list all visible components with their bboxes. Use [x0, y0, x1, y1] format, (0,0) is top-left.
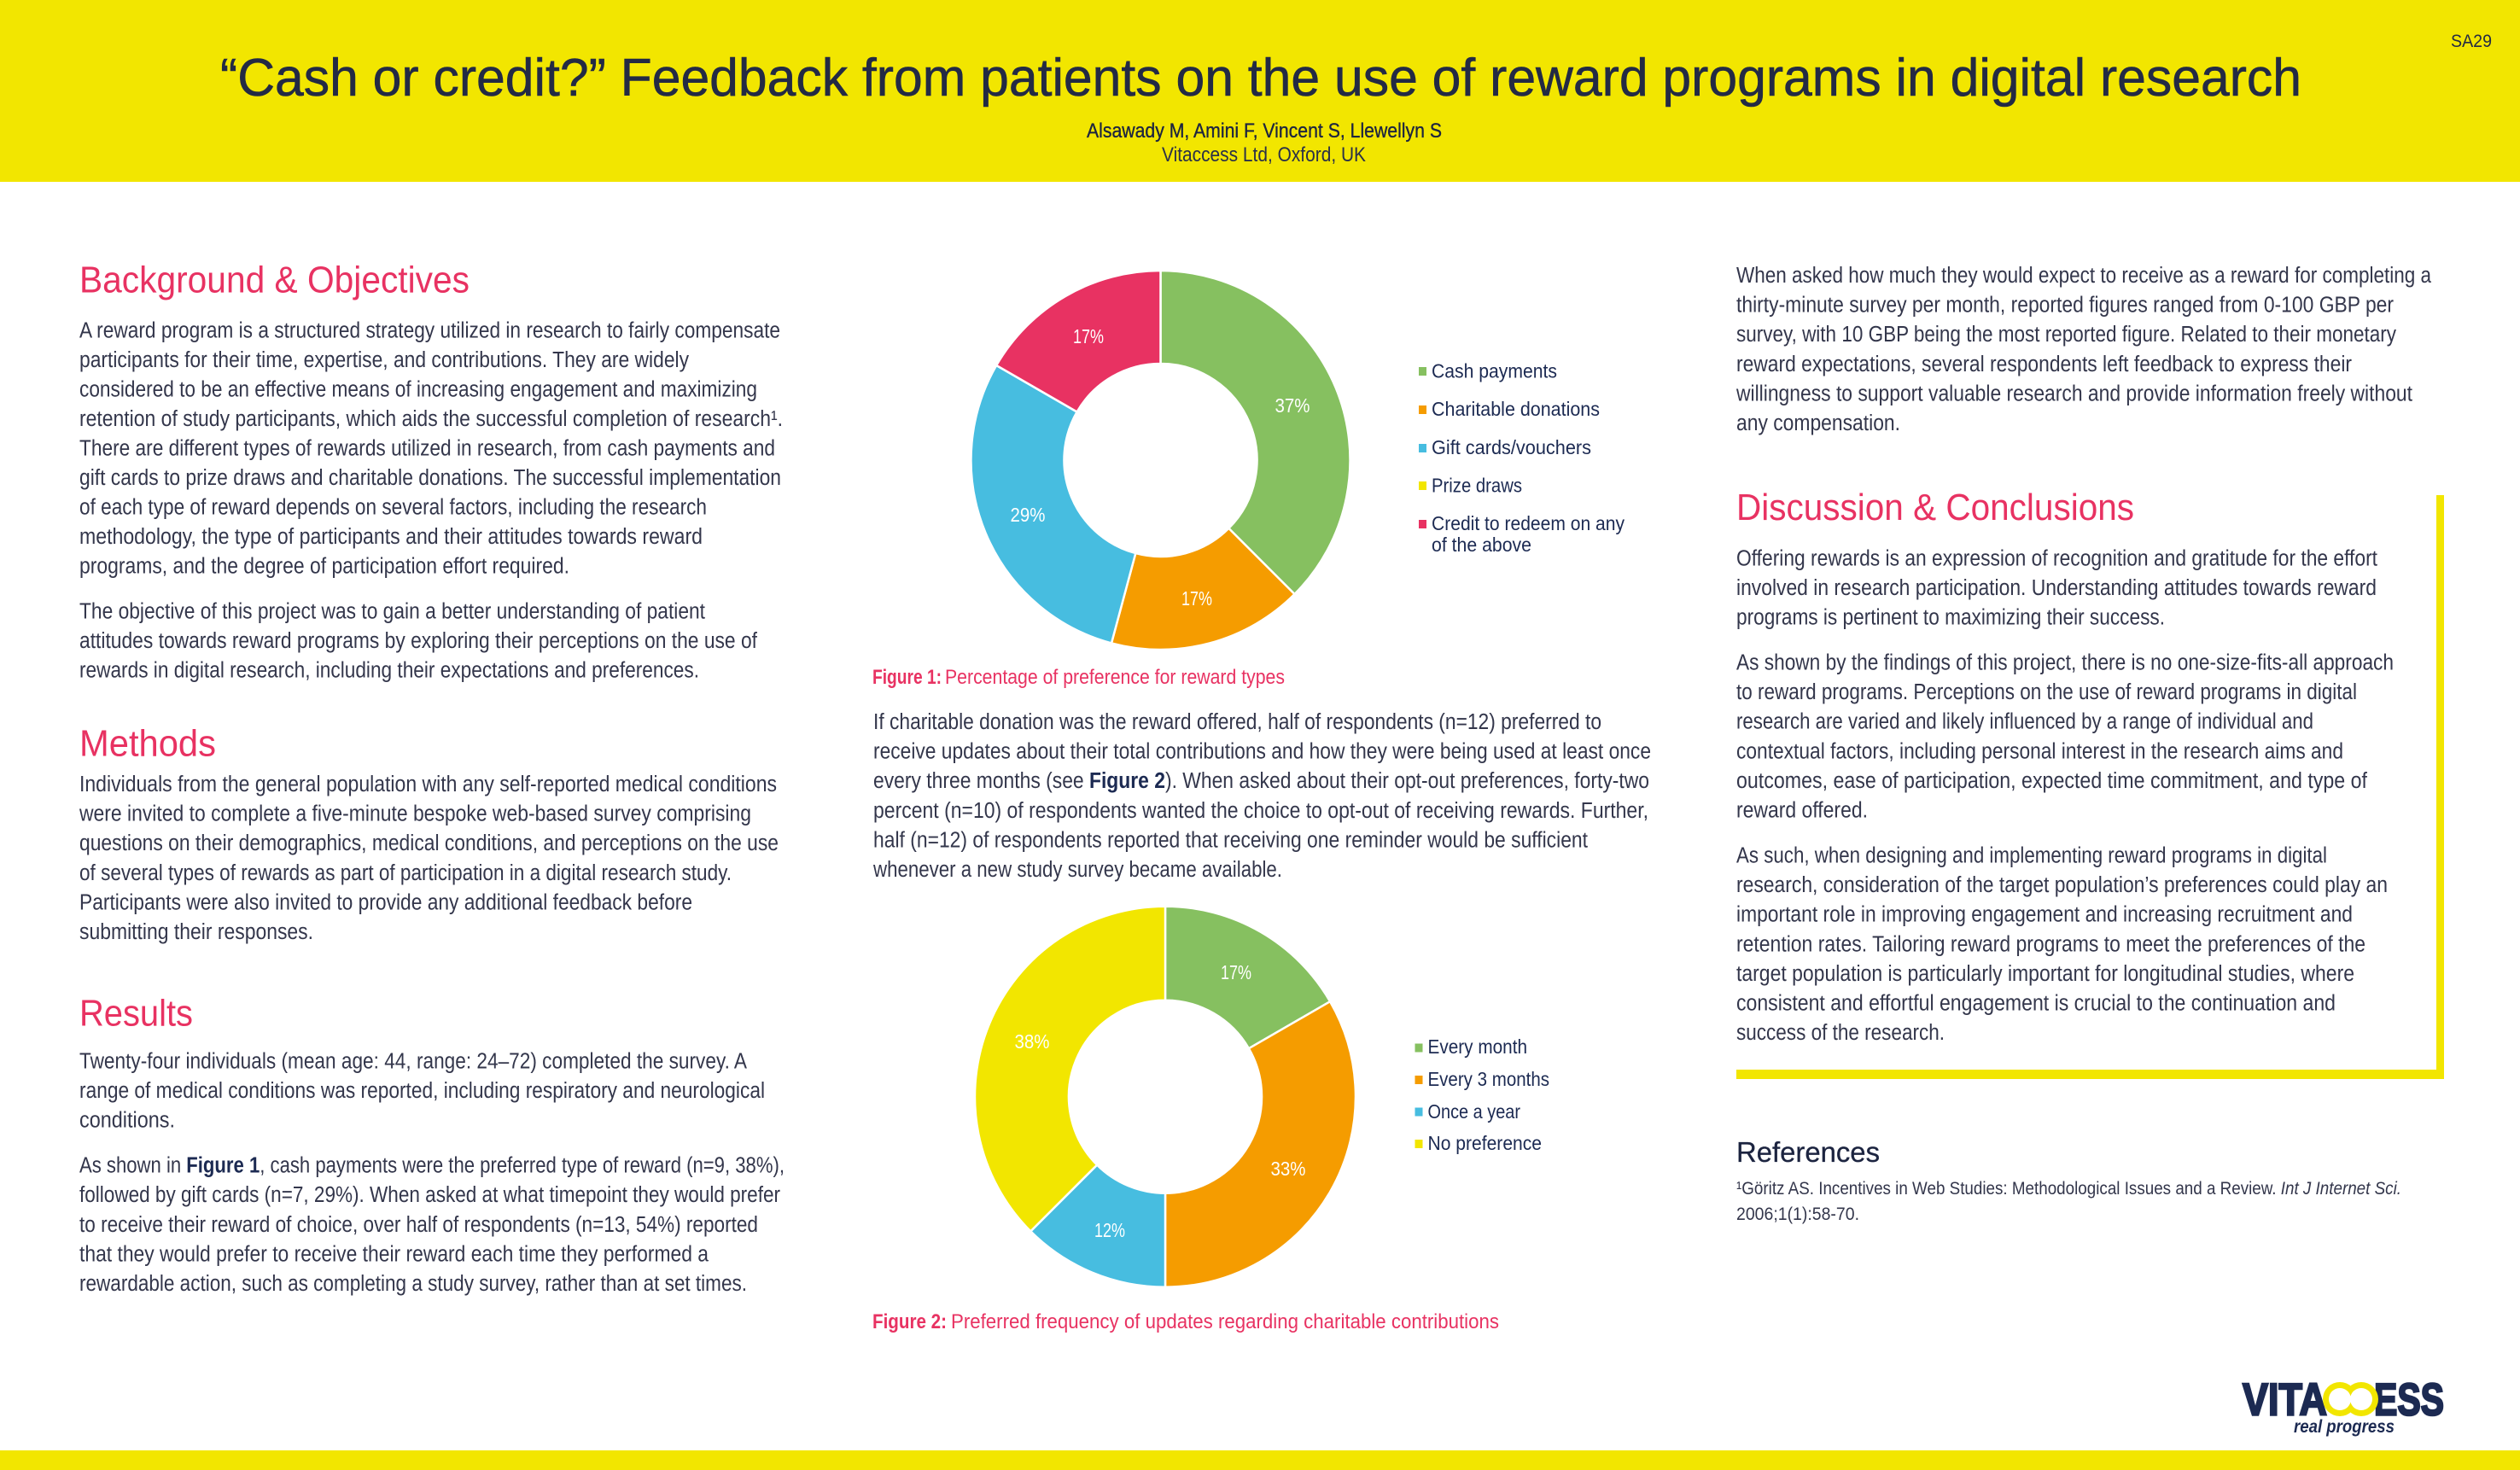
- text block: background: participants for their time, expertise, and contributions. They are widely: [79, 348, 689, 372]
- value labels: 33%: [1270, 1158, 1306, 1180]
- text block: discussion paragraph 2: contextual factors, including personal interest in the research aims and: [1736, 739, 2343, 763]
- text block: methods: Participants were also invited to provide any additional feedback before: [79, 891, 692, 915]
- text block: results detail: rewardable action, such as completing a study survey, rather than at set times.: [79, 1272, 747, 1296]
- figure 2 caption: Figure 2:: [872, 1310, 947, 1333]
- reference entry: [1736, 1179, 2401, 1224]
- text block: reward expectations: [1735, 264, 2432, 435]
- chart: figure 1 donut: [971, 271, 1350, 650]
- text block: reward expectations: willingness to support valuable research and provide information freely without: [1735, 382, 2412, 405]
- legend: figure 2: [1415, 1035, 1549, 1154]
- legend: figure 2: Every month: [1427, 1035, 1527, 1058]
- heading: references: References: [1736, 1136, 1880, 1168]
- chart: figure 2 donut: [975, 907, 1356, 1287]
- text block: reward expectations: any compensation.: [1736, 411, 1900, 435]
- legend: figure 1: of the above: [1432, 534, 1531, 556]
- text block: objective: The objective of this project was to gain a better understanding of patient: [79, 599, 705, 623]
- logo: Vitaccess: real progress: [2294, 1417, 2395, 1437]
- figure 2 caption: Preferred frequency of updates regarding charitable contributions: [951, 1310, 1499, 1333]
- text block: discussion paragraph 1: programs is pertinent to maximizing their success.: [1736, 606, 2165, 630]
- panel: discussion and conclusions: [1736, 487, 2444, 1079]
- segment: no preference: [975, 907, 1165, 1231]
- value labels: 29%: [1011, 504, 1045, 526]
- logo: Vitaccess: VITA: [2243, 1374, 2327, 1426]
- text block: background: There are different types of rewards utilized in research, from cash payments and: [79, 437, 775, 461]
- text block: discussion paragraph 3: success of the research.: [1736, 1021, 1945, 1045]
- text block: charitable donation findings: half (n=12) of respondents reported that receiving one reminder would be sufficient: [873, 828, 1588, 852]
- segment: once a year: [1030, 1165, 1165, 1287]
- value labels: [1014, 961, 1306, 1241]
- text block: methods: submitting their responses.: [79, 920, 313, 944]
- text block: results intro: range of medical conditions was reported, including respiratory and neurological: [79, 1079, 765, 1103]
- text block: discussion paragraph 3: retention rates. Tailoring reward programs to meet the preferences of the: [1736, 932, 2365, 956]
- text block: methods: questions on their demographics, medical conditions, and perceptions on the use: [79, 831, 779, 855]
- text block: results intro: Twenty-four individuals (mean age: 44, range: 24–72) completed the survey. A: [79, 1050, 747, 1074]
- legend: figure 1: [1419, 360, 1625, 556]
- value labels: [1011, 325, 1310, 610]
- text block: background: A reward program is a structured strategy utilized in research to fairly compensate: [79, 319, 780, 343]
- text block: discussion paragraph 3: consistent and effortful engagement is crucial to the continuation and: [1736, 992, 2336, 1016]
- text block: results detail: followed by gift cards (n=7, 29%). When asked at what timepoint they would prefer: [79, 1183, 780, 1207]
- text block: discussion paragraph 3: research, consideration of the target population’s preferences could play an: [1736, 873, 2388, 897]
- text block: background: [79, 319, 783, 579]
- text block: background: of each type of reward depends on several factors, including the research: [79, 495, 707, 519]
- text block: background: gift cards to prize draws and charitable donations. The successful implementation: [79, 466, 781, 490]
- text block: reward expectations: When asked how much they would expect to receive as a reward for completing a: [1736, 264, 2432, 288]
- reference entry: ¹Göritz AS. Incentives in Web Studies: Methodological Issues and a Review. Int J Internet Sci.: [1736, 1179, 2401, 1199]
- heading: background and objectives: Background & Objectives: [79, 260, 470, 300]
- text block: results detail: [79, 1154, 785, 1296]
- header banner: [0, 0, 2520, 182]
- text block: discussion paragraph 2: [1736, 650, 2394, 823]
- segment: cash payments: [1161, 271, 1350, 594]
- text block: methods: of several types of rewards as part of participation in a digital research study.: [79, 861, 732, 885]
- figure 1 caption: Figure 1:: [872, 666, 942, 689]
- heading: methods: Methods: [79, 722, 216, 765]
- text block: background: retention of study participants, which aids the successful completion of research¹.: [79, 407, 783, 431]
- text block: reward expectations: thirty-minute survey per month, reported figures ranged from 0-100 GBP per: [1736, 294, 2394, 318]
- text block: discussion paragraph 2: research are varied and likely influenced by a range of individual and: [1736, 710, 2313, 734]
- heading: results: Results: [79, 993, 193, 1035]
- text block: discussion paragraph 3: important role in improving engagement and increasing recruitment and: [1736, 903, 2353, 927]
- text block: discussion paragraph 3: As such, when designing and implementing reward programs in digital: [1736, 843, 2327, 867]
- text block: methods: were invited to complete a five-minute bespoke web-based survey comprising: [79, 802, 751, 826]
- text block: discussion paragraph 2: As shown by the findings of this project, there is no one-size-fits-all approach: [1736, 650, 2394, 674]
- text block: results detail: that they would prefer to receive their reward each time they performed a: [79, 1243, 709, 1267]
- value labels: 17%: [1073, 325, 1104, 347]
- legend: figure 2: No preference: [1427, 1132, 1542, 1154]
- figure 1 caption: Percentage of preference for reward types: [945, 666, 1285, 689]
- legend: figure 1: Prize draws: [1432, 475, 1522, 497]
- text block: objective: rewards in digital research, including their expectations and preferences.: [79, 659, 699, 683]
- segment: every 3 months: [1165, 1001, 1356, 1287]
- text block: charitable donation findings: If charitable donation was the reward offered, half of respondents (n=12) preferred to: [873, 710, 1601, 734]
- text block: background: considered to be an effective means of increasing engagement and maximizing: [79, 377, 757, 401]
- segment: gift cards: [971, 365, 1135, 643]
- text block: discussion paragraph 3: target population is particularly important for longitudinal studies, where: [1736, 962, 2354, 986]
- logo: Vitaccess: ESS: [2374, 1374, 2444, 1426]
- text block: charitable donation findings: every three months (see Figure 2). When asked about their opt-out preferences, forty-two: [873, 769, 1649, 793]
- legend: figure 1: Credit to redeem on any: [1432, 512, 1625, 534]
- legend: figure 2: Every 3 months: [1427, 1068, 1549, 1090]
- authors: Alsawady M, Amini F, Vincent S, Llewellyn S: [1087, 120, 1442, 143]
- text block: objective: attitudes towards reward programs by exploring their perceptions on the use of: [79, 629, 758, 653]
- legend: figure 1: Gift cards/vouchers: [1432, 436, 1591, 458]
- text block: charitable donation findings: percent (n=10) of respondents wanted the choice to opt-out of receiving rewards. Further,: [873, 799, 1648, 823]
- text block: results detail: to receive their reward of choice, over half of respondents (n=13, 54%) reported: [79, 1213, 758, 1237]
- segment: every month: [1165, 907, 1330, 1048]
- logo: Vitaccess: [2243, 1374, 2444, 1437]
- text block: results detail: As shown in Figure 1, cash payments were the preferred type of reward (n=9, 38%),: [79, 1154, 785, 1178]
- text block: background: programs, and the degree of participation effort required.: [79, 555, 569, 579]
- text block: discussion paragraph 2: reward offered.: [1736, 799, 1868, 823]
- text block: methods: [79, 773, 779, 944]
- affiliation: Vitaccess Ltd, Oxford, UK: [1162, 143, 1366, 166]
- value labels: 37%: [1275, 394, 1310, 417]
- panel: background and objectives: [79, 260, 783, 683]
- heading: discussion and conclusions: Discussion & Conclusions: [1736, 487, 2134, 528]
- text block: background: methodology, the type of participants and their attitudes towards reward: [79, 525, 703, 549]
- text block: discussion paragraph 1: involved in research participation. Understanding attitudes towards reward: [1736, 576, 2377, 600]
- panel: references: [1736, 1136, 2401, 1224]
- text block: charitable donation findings: receive updates about their total contributions and how they were being used at least once: [873, 740, 1651, 764]
- reference entry: 2006;1(1):58-70.: [1736, 1205, 1859, 1224]
- footer band: [0, 1450, 2520, 1470]
- text block: reward expectations: survey, with 10 GBP being the most reported figure. Related to their monetary: [1736, 323, 2396, 347]
- segment: charitable donations: [1111, 528, 1294, 650]
- text block: discussion paragraph 2: to reward programs. Perceptions on the use of reward programs in digital: [1736, 680, 2357, 704]
- panel: methods: [79, 722, 779, 944]
- legend: figure 1: Cash payments: [1432, 360, 1557, 382]
- yellow corner frame: [1736, 495, 2444, 1079]
- title: “Cash or credit?” Feedback from patients on the use of reward programs in digital research: [220, 49, 2301, 108]
- value labels: 38%: [1014, 1030, 1050, 1053]
- value labels: 17%: [1221, 961, 1251, 983]
- text block: results intro: conditions.: [79, 1108, 175, 1132]
- text block: objective: [79, 599, 758, 683]
- text block: charitable donation findings: [872, 710, 1651, 882]
- legend: figure 2: Once a year: [1427, 1100, 1520, 1123]
- value labels: 12%: [1094, 1219, 1125, 1241]
- text block: results intro: [79, 1050, 765, 1132]
- poster code: SA29: [2451, 32, 2492, 51]
- text block: discussion paragraph 2: outcomes, ease of participation, expected time commitment, and type of: [1736, 769, 2368, 793]
- text block: discussion paragraph 3: [1736, 843, 2388, 1045]
- panel: results: [79, 993, 785, 1296]
- legend: figure 1: Charitable donations: [1432, 398, 1600, 420]
- value labels: 17%: [1181, 587, 1212, 610]
- segment: credit: [996, 271, 1161, 411]
- text block: reward expectations: reward expectations, several respondents left feedback to express their: [1736, 353, 2352, 376]
- text block: methods: Individuals from the general population with any self-reported medical conditions: [79, 773, 777, 796]
- text block: discussion paragraph 1: Offering rewards is an expression of recognition and gratitude for the effort: [1736, 546, 2377, 570]
- text block: discussion paragraph 1: [1736, 546, 2377, 630]
- text block: charitable donation findings: whenever a new study survey became available.: [872, 858, 1282, 882]
